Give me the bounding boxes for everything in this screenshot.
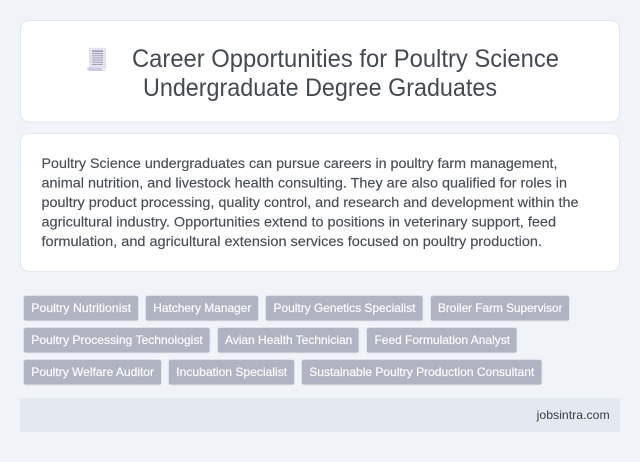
tag: Avian Health Technician: Avian Health Technician (225, 333, 352, 347)
tag list (24, 296, 570, 385)
icon: document scroll (87, 48, 106, 71)
text block: description: Poultry Science undergraduates can pursue careers in poultry farm management, (42, 155, 558, 171)
tag: Sustainable Poultry Production Consultant: Sustainable Poultry Production Consultant (309, 365, 535, 379)
tag: Feed Formulation Analyst (366, 328, 517, 353)
tag: Poultry Processing Technologist (24, 328, 210, 353)
text block: description (42, 155, 579, 249)
tag: Poultry Nutritionist (24, 296, 138, 321)
title: Career Opportunities for Poultry Science (132, 45, 559, 73)
tag: Avian Health Technician (218, 328, 359, 353)
tag: Poultry Welfare Auditor: Poultry Welfare Auditor (31, 365, 154, 379)
tag: Hatchery Manager: Hatchery Manager (153, 301, 251, 315)
tag: Incubation Specialist (168, 360, 294, 385)
tag: Poultry Genetics Specialist (266, 296, 423, 321)
tag: Poultry Welfare Auditor (24, 360, 162, 385)
title: Undergraduate Degree Graduates (143, 74, 497, 102)
tag: Hatchery Manager (146, 296, 258, 321)
tag: Sustainable Poultry Production Consultant (302, 360, 542, 385)
title (132, 45, 559, 102)
text block: description: agricultural industry. Opportunities extend to positions in veterinary support, feed (42, 214, 556, 230)
tag: Poultry Nutritionist: Poultry Nutritionist (31, 301, 132, 315)
tag: Broiler Farm Supervisor: Broiler Farm Supervisor (438, 301, 562, 315)
tag: Broiler Farm Supervisor (430, 296, 570, 321)
text block: description: animal nutrition, and livestock health consulting. They are also qualified for roles in (42, 174, 567, 190)
panel: description (20, 134, 620, 272)
tag: Poultry Genetics Specialist: Poultry Genetics Specialist (274, 301, 416, 315)
text block: description: poultry product processing, quality control, and research and development within the (42, 194, 579, 210)
footer source text: jobsintra.com (536, 408, 610, 422)
footer bar (20, 398, 620, 432)
tag: Feed Formulation Analyst: Feed Formulation Analyst (374, 333, 511, 347)
text block: description: formulation, and agricultural extension services focused on poultry production. (42, 233, 542, 249)
panel: title header (20, 20, 620, 122)
tag: Poultry Processing Technologist: Poultry Processing Technologist (31, 333, 203, 347)
tag: Incubation Specialist: Incubation Specialist (176, 365, 288, 379)
